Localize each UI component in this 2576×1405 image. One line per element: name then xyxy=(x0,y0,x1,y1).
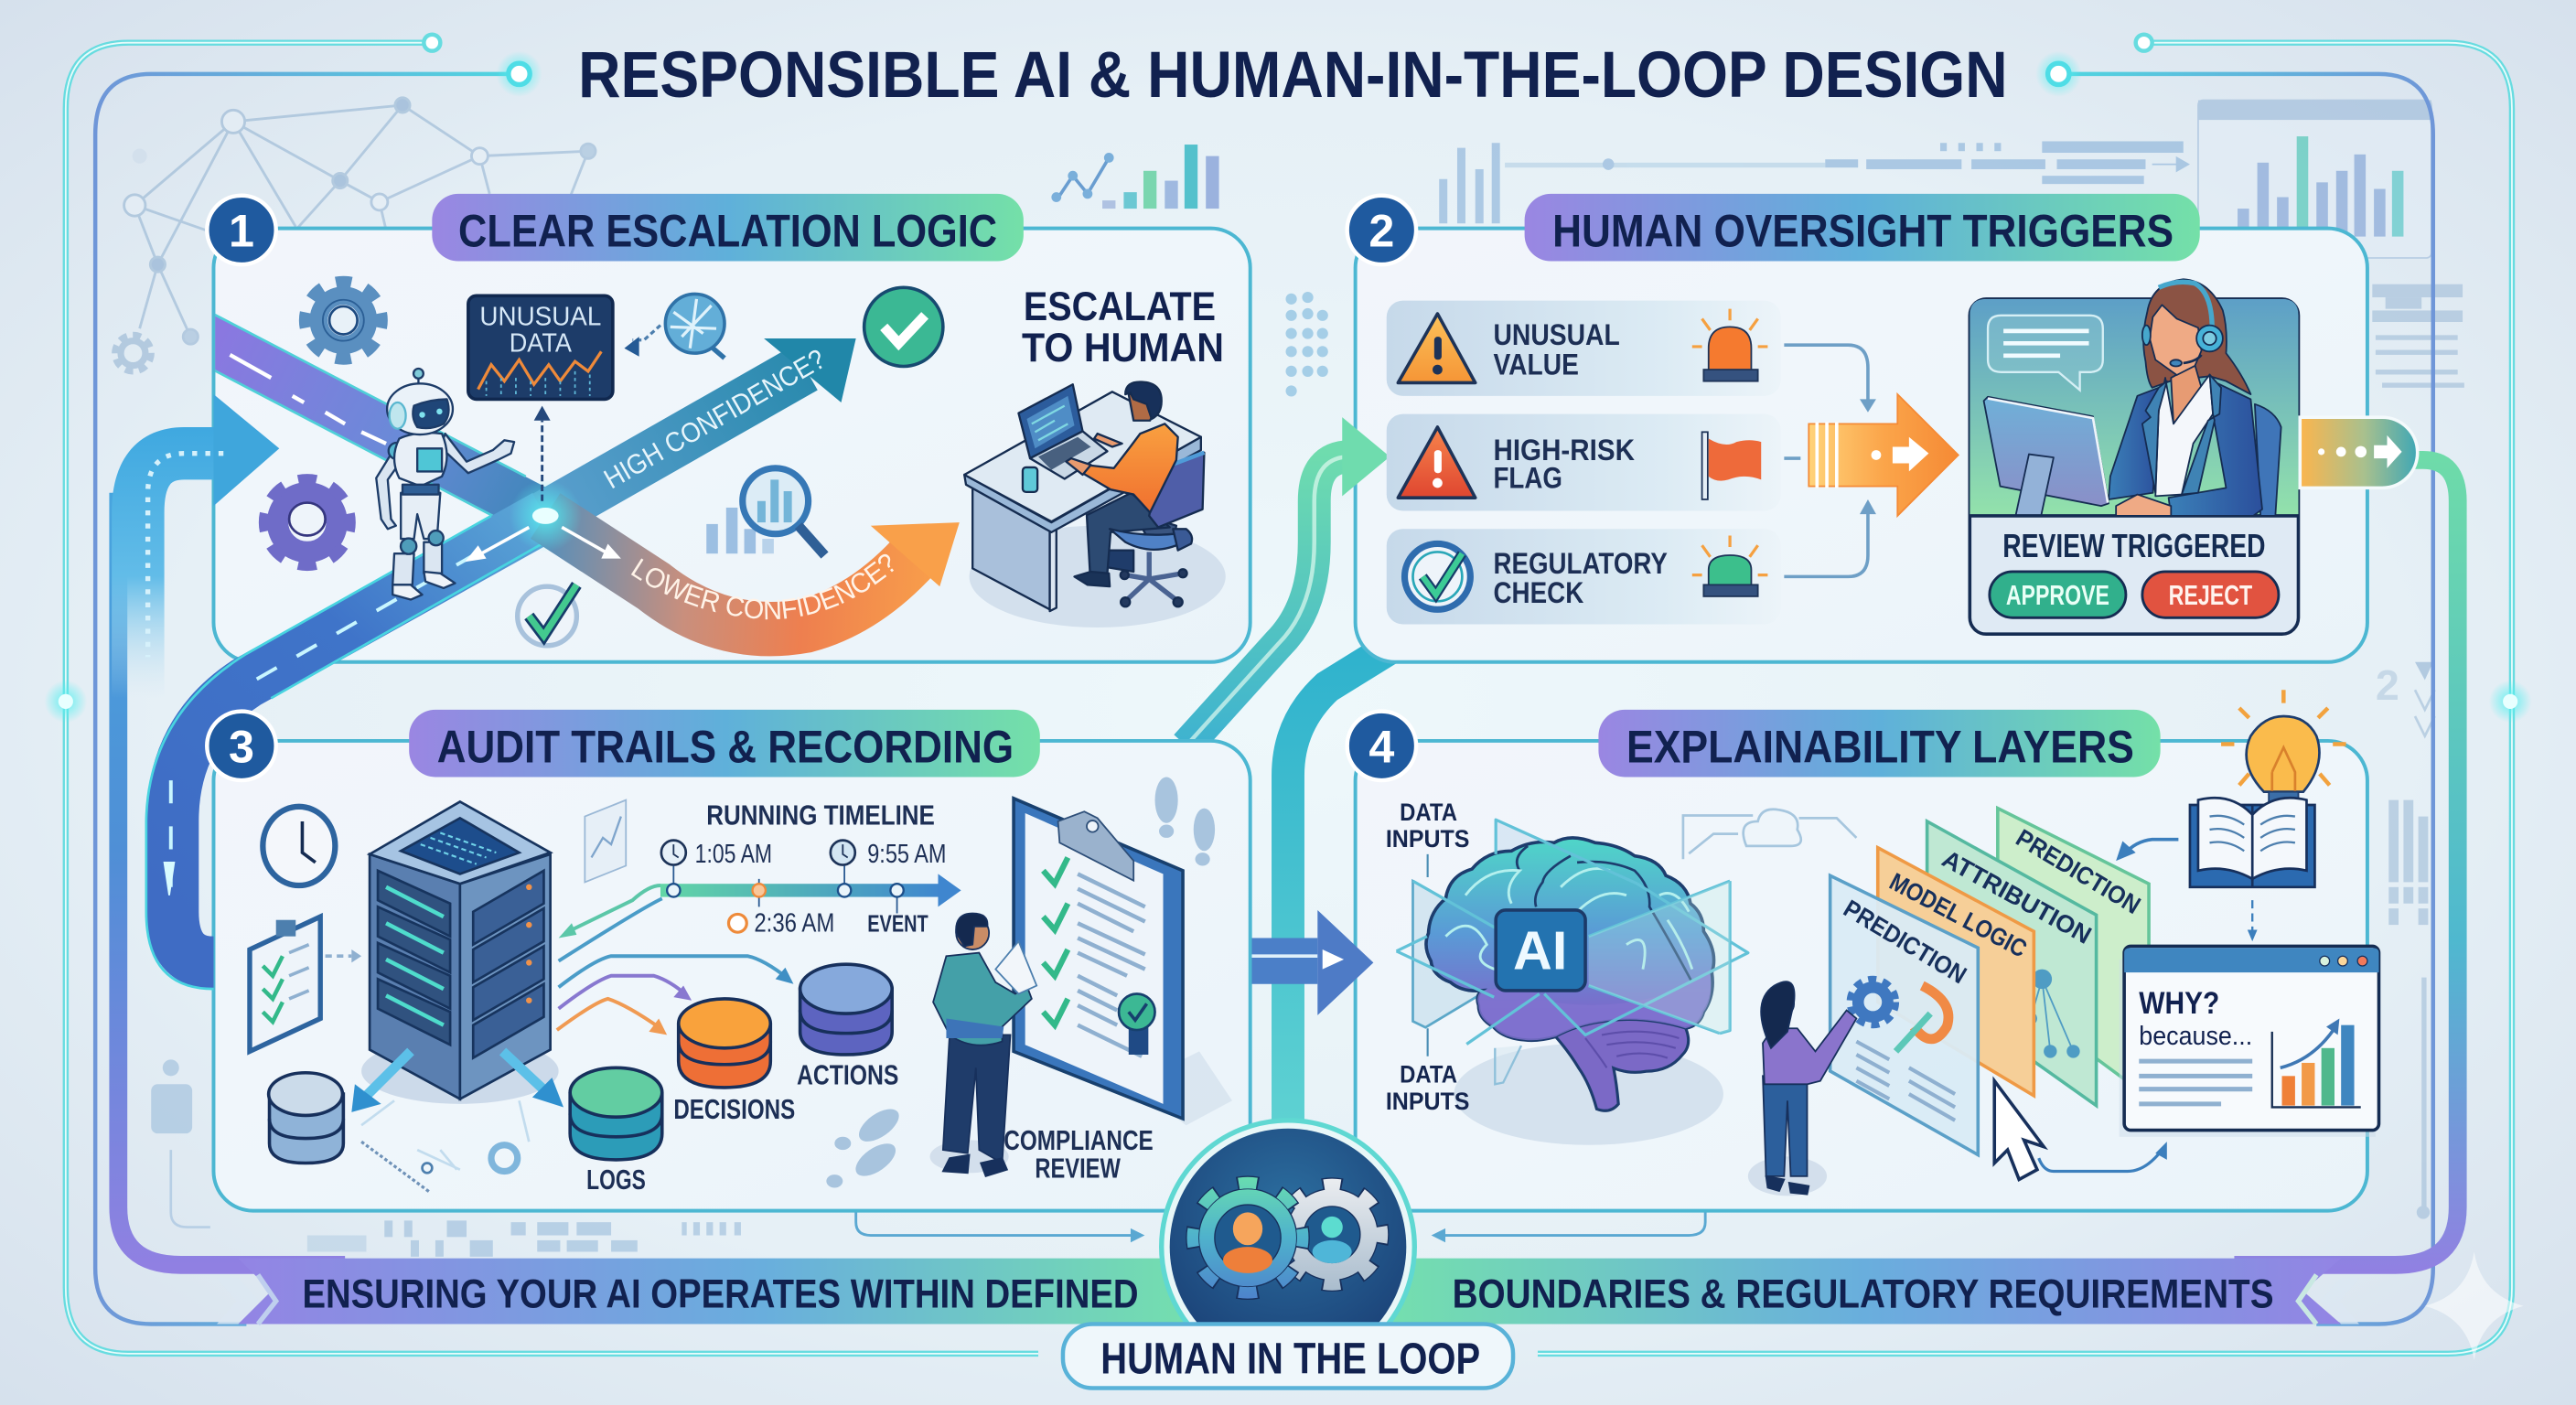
arrow from panel 3 to panel 4 xyxy=(1251,910,1373,1015)
icon: magnifier with bars xyxy=(706,468,825,555)
data inputs labels: DATA xyxy=(1400,1061,1457,1089)
timeline: RUNNING TIMELINE xyxy=(706,800,935,831)
person at desk xyxy=(964,382,1226,627)
heading pill 1: CLEAR ESCALATION LOGIC xyxy=(458,204,997,256)
trigger row: unusual value: UNUSUAL xyxy=(1493,318,1620,351)
number badge 2 xyxy=(1347,196,1416,264)
speech bubble xyxy=(1988,316,2103,391)
explanation window xyxy=(2120,946,2378,1137)
trigger row: regulatory check: REGULATORY xyxy=(1493,547,1668,580)
flow band from hub upward xyxy=(1288,644,1397,1133)
heading pill 4: EXPLAINABILITY LAYERS xyxy=(1626,720,2134,772)
AI brain: AI xyxy=(1513,920,1567,981)
heading pill 2: HUMAN OVERSIGHT TRIGGERS xyxy=(1552,204,2174,256)
loop band left xyxy=(118,493,345,1265)
footprints top xyxy=(1155,777,1215,865)
compliance review label: COMPLIANCE xyxy=(1004,1125,1154,1156)
escalate to human label: ESCALATE xyxy=(1024,283,1216,329)
layer: prediction front xyxy=(1830,875,1978,1155)
panel 1 box xyxy=(213,229,1250,662)
AI brain xyxy=(1397,820,1748,1145)
data flow arrows xyxy=(557,885,793,1035)
database: plain xyxy=(269,1073,343,1164)
layer: model logic: MODEL LOGIC xyxy=(1885,868,2032,963)
icon: small check badge xyxy=(518,585,576,646)
trigger row: high-risk flag xyxy=(1387,414,1781,511)
trigger row: unusual value xyxy=(1387,301,1781,396)
title: RESPONSIBLE AI & HUMAN-IN-THE-LOOP DESIGN xyxy=(578,38,2008,112)
review triggered label: REVIEW TRIGGERED xyxy=(2002,527,2266,564)
explanation window: WHY? xyxy=(2139,986,2219,1021)
background decoration: small chart top left xyxy=(1051,145,1219,209)
timeline: EVENT xyxy=(867,909,928,937)
layer: attribution: ATTRIBUTION xyxy=(1937,845,2096,949)
database: actions: ACTIONS xyxy=(797,1059,898,1090)
icon: small clipboard xyxy=(250,917,361,1051)
data inputs labels: DATA xyxy=(1400,799,1457,826)
compliance reviewer xyxy=(929,914,1036,1176)
trigger row: unusual value: VALUE xyxy=(1493,348,1579,381)
bottom banner left: ENSURING YOUR AI OPERATES WITHIN DEFINED xyxy=(302,1271,1139,1317)
lower confidence arrow xyxy=(531,494,960,657)
background decoration: right data dashes xyxy=(2372,284,2464,1219)
label: lower confidence: LOWER CONFIDENCE? xyxy=(631,554,894,620)
outer frame line left xyxy=(66,43,1038,1354)
background decoration: right side mark: 2 xyxy=(2376,661,2399,709)
lower left connector arrow xyxy=(856,1212,1142,1240)
icon: green check circle xyxy=(864,287,943,366)
number badge 1: 1 xyxy=(229,204,254,256)
approve button: APPROVE xyxy=(2006,580,2109,611)
gear with teal person xyxy=(1282,1185,1382,1284)
layer: prediction front: PREDICTION xyxy=(1839,895,1971,989)
trigger row: high-risk flag: FLAG xyxy=(1493,461,1562,494)
road: blue descending loop xyxy=(146,516,545,989)
compliance review label: REVIEW xyxy=(1035,1153,1121,1185)
heading pill 2 xyxy=(1525,194,2200,262)
heading pill 1 xyxy=(432,194,1024,262)
timeline xyxy=(660,800,961,938)
connector arrows into orange arrow xyxy=(1784,345,1876,576)
panel 4 box xyxy=(1356,741,2367,1211)
approve button xyxy=(1990,572,2126,617)
panel 2 box xyxy=(1356,229,2367,662)
trigger row: regulatory check xyxy=(1387,529,1781,624)
layer: prediction back: PREDICTION xyxy=(2012,824,2145,919)
number badge 3: 3 xyxy=(229,720,254,772)
road: purple approach xyxy=(198,306,545,516)
flow band between panels to trigger panel xyxy=(1186,456,1350,745)
number badge 3 xyxy=(207,712,276,780)
data inputs labels: INPUTS xyxy=(1386,825,1469,853)
bottom banner right xyxy=(1389,1259,2359,1325)
icon: purple gear xyxy=(264,479,350,565)
bottom banner right: BOUNDARIES & REGULATORY REQUIREMENTS xyxy=(1453,1271,2274,1317)
trigger row: regulatory check: CHECK xyxy=(1493,576,1584,609)
crossing node with small arrows xyxy=(465,479,621,562)
heading pill 3 xyxy=(409,710,1040,777)
light arrow into panel 1 xyxy=(138,394,279,698)
outer frame line right xyxy=(1538,43,2512,1354)
escalate to human label xyxy=(1022,283,1224,370)
explanation window: because... xyxy=(2139,1022,2252,1051)
human in the loop pill: HUMAN IN THE LOOP xyxy=(1100,1334,1480,1383)
database: logs: LOGS xyxy=(586,1164,646,1196)
arrows from book xyxy=(2116,840,2258,941)
timeline: 2:36 AM xyxy=(754,908,834,938)
bottom banner left xyxy=(217,1259,1191,1325)
human in the loop hub xyxy=(1159,1119,1417,1323)
return arrow under window xyxy=(2039,1142,2167,1171)
layer: attribution xyxy=(1927,821,2097,1106)
number badge 1 xyxy=(207,196,276,264)
layer: prediction back xyxy=(1998,809,2149,1098)
database: logs xyxy=(570,1067,662,1196)
compliance review label xyxy=(1004,1125,1154,1185)
big orange arrow xyxy=(1809,394,1959,516)
label: high confidence: HIGH CONFIDENCE? xyxy=(599,343,831,495)
human in the loop pill xyxy=(1063,1325,1513,1389)
database: decisions: DECISIONS xyxy=(673,1094,795,1125)
analyst woman xyxy=(1748,981,1856,1196)
background decoration: top right dashboard xyxy=(2198,101,2431,258)
database: actions xyxy=(797,964,898,1090)
unusual data screen: DATA xyxy=(510,328,573,358)
icon: small chart card xyxy=(585,800,626,882)
data inputs labels: INPUTS xyxy=(1386,1088,1469,1115)
timeline: 1:05 AM xyxy=(695,840,772,869)
icon: blue gear xyxy=(305,282,382,359)
high confidence arrow xyxy=(545,338,856,516)
background decoration: network graph xyxy=(115,98,596,371)
inner frame line right xyxy=(2058,74,2433,1325)
agent with headset xyxy=(1984,279,2281,516)
background decoration: left dots xyxy=(1285,292,1328,397)
inner frame line left xyxy=(95,74,520,1325)
icon: light bulb xyxy=(2221,690,2346,805)
server tower xyxy=(361,801,559,1104)
unusual data screen xyxy=(468,295,613,399)
frame nodes xyxy=(44,35,2532,723)
mouse cursor xyxy=(1994,1081,2044,1179)
compliance clipboard xyxy=(1014,799,1232,1125)
number badge 4: 4 xyxy=(1368,720,1394,772)
data inputs labels xyxy=(1386,799,1469,1115)
outgoing arrow pill xyxy=(2300,417,2418,488)
database: decisions xyxy=(673,999,795,1125)
background decoration: top middle data strip xyxy=(1439,141,2188,223)
flow arrow head into panel 2 xyxy=(1342,417,1390,496)
background decoration: bottom left icons and dashes xyxy=(151,1059,741,1257)
lower right connector arrow xyxy=(1434,1212,1705,1240)
number badge 2: 2 xyxy=(1368,204,1394,256)
heading pill 3: AUDIT TRAILS & RECORDING xyxy=(437,720,1014,772)
dashed upward arrow xyxy=(534,406,551,501)
server downward arrows xyxy=(351,1051,564,1193)
timeline: 9:55 AM xyxy=(867,840,946,869)
review card xyxy=(1970,279,2298,634)
number badge 4 xyxy=(1347,712,1416,780)
cloud link xyxy=(1683,810,1856,859)
layer: model logic xyxy=(1878,848,2034,1096)
icon: open book xyxy=(2190,798,2314,887)
reject button: REJECT xyxy=(2169,580,2252,611)
escalate to human label: TO HUMAN xyxy=(1022,324,1224,370)
unusual data screen: UNUSUAL xyxy=(479,303,601,332)
icon: wall clock xyxy=(263,807,335,885)
gear with orange person xyxy=(1193,1183,1303,1292)
icon: brain sphere with arrow xyxy=(624,294,724,359)
heading pill 4 xyxy=(1598,710,2161,777)
loop band right xyxy=(2234,460,2458,1265)
trigger row: high-risk flag: HIGH-RISK xyxy=(1493,434,1636,467)
reject button xyxy=(2142,572,2279,617)
panel 3 box xyxy=(213,741,1250,1211)
watermark sparkle xyxy=(2425,1251,2524,1360)
footprints bottom xyxy=(826,1102,905,1187)
background decoration: right side mark xyxy=(2376,661,2435,736)
robot xyxy=(376,369,514,600)
